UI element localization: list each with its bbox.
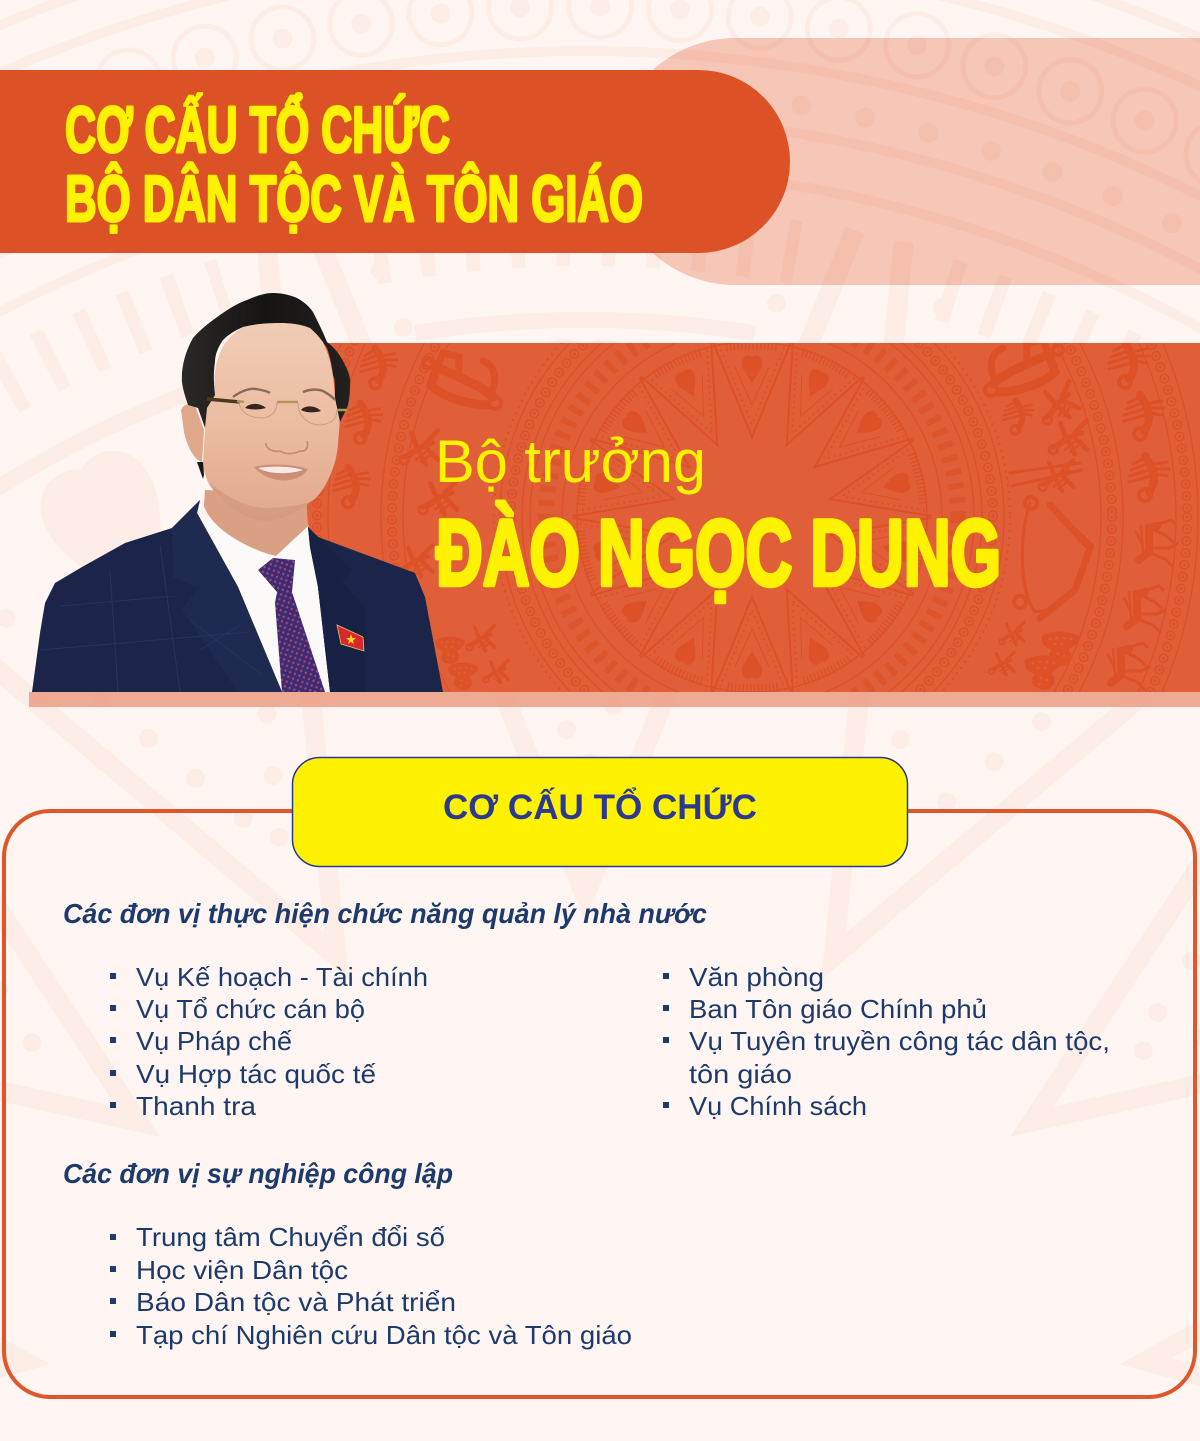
banner underline strip [29, 692, 1200, 707]
list: state management units, left column: Thanh tra [136, 1091, 257, 1121]
ear [181, 404, 204, 462]
lapels [172, 500, 282, 692]
section heading badge [292, 758, 908, 866]
minister title: Bộ trưởng [435, 428, 706, 495]
header banner [0, 70, 790, 253]
list: state management units, left column [110, 962, 428, 1121]
glasses [207, 399, 347, 425]
heading: state management units: Các đơn vị thực hiện chức năng quản lý nhà nước [63, 898, 707, 929]
panel: minister banner [300, 71, 1200, 963]
decorative pale pill behind header [612, 38, 1200, 285]
hair [182, 293, 350, 428]
list: state management units, right column: Vụ Chính sách [689, 1091, 867, 1121]
neck [204, 490, 308, 556]
list: state management units, right column: Ban Tôn giáo Chính phủ [689, 994, 987, 1024]
eyes [245, 404, 321, 412]
suit [32, 500, 282, 692]
list: state management units, left column: Vụ Pháp chế [136, 1026, 293, 1056]
list: state management units, left column: Vụ Hợp tác quốc tế [136, 1059, 377, 1089]
face [203, 322, 340, 521]
pin flag [337, 625, 364, 651]
title [65, 93, 643, 235]
list: state management units, right column: Vụ Tuyên truyền công tác dân tộc, [689, 1026, 1110, 1056]
suit check lines [40, 545, 262, 692]
list: public service units: Tạp chí Nghiên cứu Dân tộc và Tôn giáo [136, 1320, 632, 1350]
list: public service units: Báo Dân tộc và Phát triển [136, 1287, 456, 1317]
nose [266, 441, 308, 454]
panel: organisational structure card [4, 758, 1195, 1397]
eyebrows [233, 389, 335, 400]
list: public service units [110, 1222, 632, 1350]
list: state management units, right column: tôn giáo [689, 1059, 792, 1089]
list: state management units, left column: Vụ Tổ chức cán bộ [136, 994, 365, 1024]
list: public service units: Học viện Dân tộc [136, 1255, 348, 1285]
shirt [197, 508, 330, 692]
drum engraving on banner [312, 343, 1198, 692]
sideburn [197, 462, 204, 479]
tie [258, 558, 325, 692]
jaw shading [208, 482, 310, 521]
title: BỘ DÂN TỘC VÀ TÔN GIÁO [65, 162, 643, 235]
list: state management units, left column: Vụ Kế hoạch - Tài chính [136, 962, 428, 992]
list: state management units, right column: Văn phòng [689, 962, 824, 992]
portrait illustration [32, 293, 443, 692]
mouth [254, 465, 308, 480]
section heading badge: CƠ CẤU TỔ CHỨC [443, 787, 757, 827]
list: state management units, right column [663, 962, 1110, 1121]
heading: public service units: Các đơn vị sự nghiệp công lập [63, 1158, 453, 1189]
list: public service units: Trung tâm Chuyển đổi số [136, 1222, 445, 1252]
title: CƠ CẤU TỔ CHỨC [65, 93, 450, 166]
